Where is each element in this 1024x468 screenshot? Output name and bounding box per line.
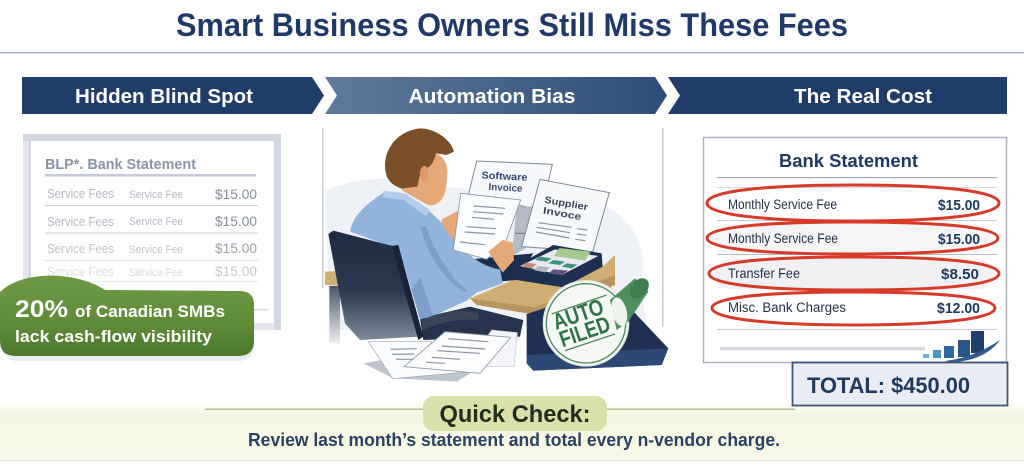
fee row 2: Monthly Service Fee <box>728 231 838 246</box>
faded row 3 <box>47 240 257 256</box>
mini bar chart <box>923 331 1000 362</box>
callout: 20% of Canadian SMBs: of Canadian SMBs <box>75 303 225 321</box>
faded row 3: Service Fee <box>129 244 183 256</box>
arrow header: Hidden Blind Spot <box>22 77 324 114</box>
fee row 2: $15.00 <box>938 232 980 248</box>
arrow header: Automation Bias: Automation Bias <box>408 86 576 108</box>
arrow header: Automation Bias <box>325 77 667 114</box>
statement heading: Bank Statement <box>779 151 918 171</box>
stamp handle <box>609 275 653 330</box>
fee row 2 <box>707 222 998 254</box>
faded row 1: $15.00 <box>215 186 257 202</box>
man <box>350 128 503 319</box>
faded row 3: $15.00 <box>215 240 257 256</box>
stamp: auto filed <box>543 275 653 366</box>
illustration: man reviewing invoices at desk <box>325 128 668 382</box>
fee row 3: $8.50 <box>941 267 979 283</box>
quick check label <box>423 396 607 431</box>
hair <box>385 128 454 189</box>
faded row 2: Service Fee <box>129 216 183 228</box>
faded row 1: Service Fees <box>47 187 114 201</box>
software invoice: Software <box>481 170 528 184</box>
faded row 4: Service Fee <box>129 267 183 279</box>
statement heading: BLP*. Bank Statement <box>45 156 196 173</box>
desk <box>325 253 615 315</box>
fee row 4: $12.00 <box>937 301 980 317</box>
faded row 3: Service Fees <box>47 242 114 256</box>
fee row 1: Monthly Service Fee <box>728 197 837 212</box>
faded row 2: Service Fees <box>47 215 114 229</box>
band: quick check <box>0 396 1024 461</box>
arrow header: Hidden Blind Spot: Hidden Blind Spot <box>75 86 253 108</box>
hand right <box>488 240 514 273</box>
software invoice: Invoice <box>488 182 523 195</box>
shirt <box>350 192 503 319</box>
arrow header: The Real Cost <box>668 77 1007 114</box>
callout: 20% of Canadian SMBs <box>0 276 254 361</box>
supplier invoice <box>522 179 609 252</box>
stamp: auto filed: FILED <box>556 311 613 352</box>
title: Smart Business Owners Still Miss These Fees <box>176 7 848 43</box>
total box: TOTAL: $450.00 <box>807 373 970 398</box>
fee row 3 <box>709 257 999 290</box>
faded row 4: Service Fees <box>47 265 114 279</box>
stamp: auto filed: AUTO <box>549 293 607 335</box>
panel: bank statement with circled fees <box>704 138 1006 362</box>
papers on the floor <box>363 330 517 382</box>
neck and face <box>402 153 447 205</box>
supplier invoice: Invoce <box>542 205 583 223</box>
faded row 1 <box>47 186 257 202</box>
chair <box>328 231 478 340</box>
faded row 4 <box>47 263 257 279</box>
held paper <box>453 193 521 259</box>
dark trousers <box>420 307 523 340</box>
calculator <box>515 245 603 287</box>
fee row 3: Transfer Fee <box>728 266 800 281</box>
total box <box>792 362 1008 406</box>
faded row 2 <box>47 213 257 229</box>
callout: 20% of Canadian SMBs: lack cash-flow visibility <box>15 327 213 346</box>
callout: 20% of Canadian SMBs: 20% <box>15 296 68 323</box>
hand left <box>442 210 468 239</box>
arrow header: The Real Cost: The Real Cost <box>794 86 932 108</box>
panel: faded bank statement <box>23 134 281 330</box>
fee row 4: Misc. Bank Charges <box>728 300 846 315</box>
software invoice <box>468 161 552 210</box>
faded row 1: Service Fee <box>129 189 183 201</box>
faded row 4: $15.00 <box>215 263 257 279</box>
faded row 2: $15.00 <box>215 213 257 229</box>
fee row 1 <box>707 185 999 221</box>
instruction text: Review last month’s statement and total every n-vendor charge. <box>248 430 780 450</box>
quick check label: Quick Check: <box>440 401 590 428</box>
fee row 1: $15.00 <box>938 198 980 214</box>
scanner base <box>527 287 668 371</box>
supplier invoice: Supplier <box>543 195 589 213</box>
fee row 4 <box>712 292 995 325</box>
